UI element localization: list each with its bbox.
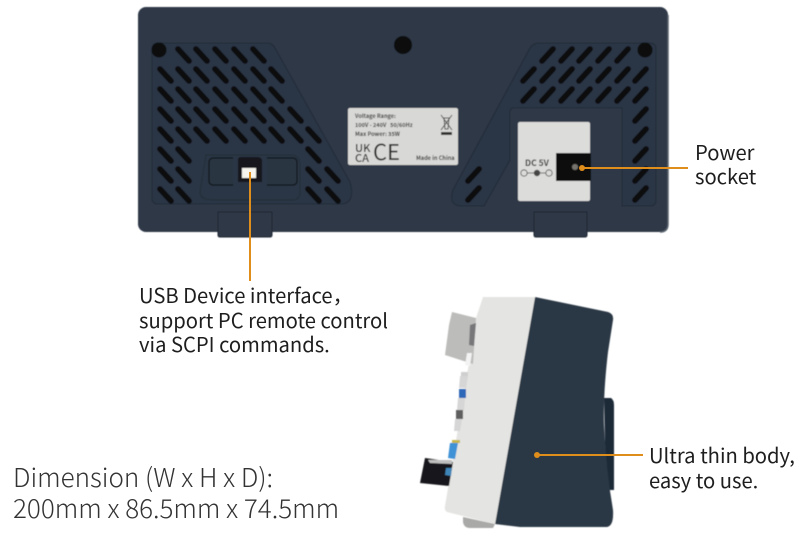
right vent recess — [452, 43, 656, 206]
text: USB interface description: USB Device interface， — [139, 280, 353, 309]
left foot — [218, 212, 272, 237]
text: dimensions: Dimension (W x H x D): — [13, 458, 273, 495]
text: power socket: socket — [695, 161, 757, 190]
centre screw hole — [394, 36, 412, 54]
rating label: Made in China — [416, 154, 455, 162]
rating label — [348, 108, 458, 167]
panel: rear view of device — [138, 7, 668, 237]
text: USB interface description: support PC remote control — [139, 305, 388, 334]
callout: USB leader line — [249, 172, 251, 281]
panel: side view of device — [420, 297, 614, 528]
right foot — [534, 212, 587, 237]
front panel side — [445, 297, 535, 524]
rating label: CA — [355, 150, 369, 166]
right corner hole — [638, 42, 652, 58]
rating label: CE — [373, 135, 400, 167]
bottom foot — [463, 517, 495, 528]
rating label: UK — [355, 140, 371, 156]
rear stand — [604, 398, 614, 490]
power socket plate: DC 5V — [525, 157, 550, 169]
text: power socket: Power — [695, 137, 755, 166]
USB port recess — [200, 155, 300, 200]
rear body — [138, 7, 668, 232]
left corner hole — [152, 42, 166, 58]
left vent recess — [152, 43, 352, 204]
callout: power leader line — [579, 165, 688, 171]
rating label: Voltage Range: — [354, 112, 396, 120]
dark body side — [495, 297, 613, 527]
front buttons — [448, 372, 468, 459]
text: ultra thin body: Ultra thin body, — [649, 440, 795, 469]
text: USB interface description: via SCPI commands. — [139, 329, 330, 358]
rating label: Max Power: 35W — [355, 130, 400, 138]
callout: body leader line — [534, 452, 643, 458]
right vent slots — [468, 49, 646, 200]
rating label: 100V - 240V 50/60Hz — [355, 121, 413, 129]
text: ultra thin body: easy to use. — [649, 465, 758, 494]
USB stick — [420, 458, 453, 486]
knob — [445, 312, 476, 366]
power socket plate — [518, 122, 591, 201]
left vent slots — [160, 49, 338, 201]
text: dimensions: 200mm x 86.5mm x 74.5mm — [13, 489, 339, 526]
